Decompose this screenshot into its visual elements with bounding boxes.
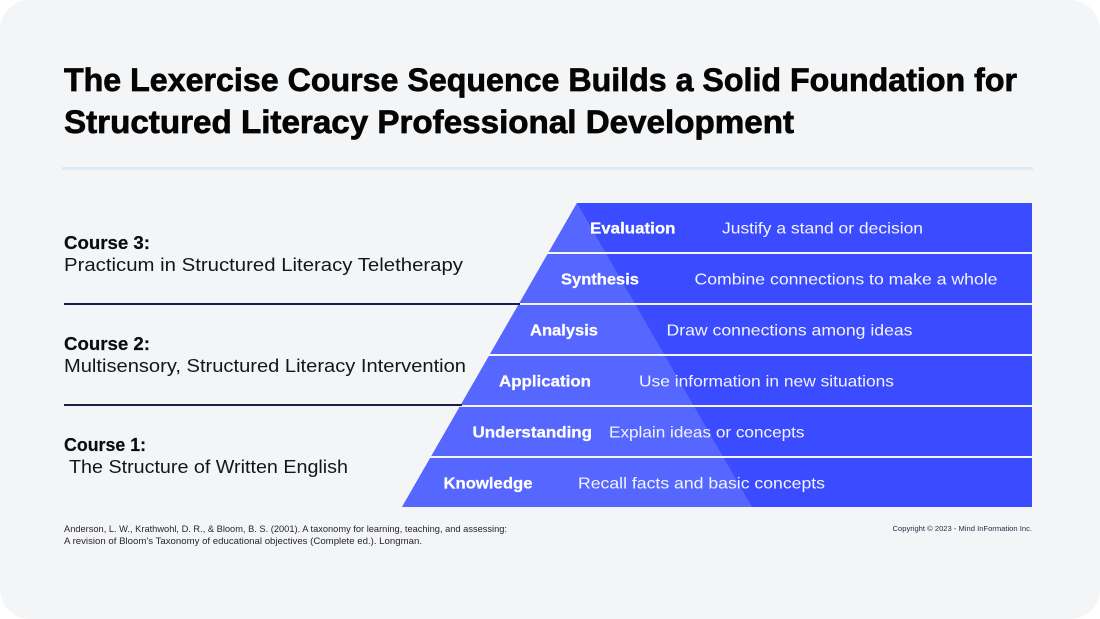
level: synthesis: Combine connections to make a whole xyxy=(694,272,998,288)
level: understanding: Explain ideas or concepts xyxy=(609,424,804,442)
level: knowledge xyxy=(444,476,825,492)
level: synthesis xyxy=(561,272,998,288)
course 1 label: The Structure of Written English xyxy=(69,456,348,477)
level: analysis: Draw connections among ideas xyxy=(666,322,912,340)
level: synthesis: Synthesis xyxy=(561,272,639,288)
level: application: Use information in new situations xyxy=(639,374,894,390)
course 3 label: Course 3: xyxy=(64,232,150,253)
course 2 label: Course 2: xyxy=(64,333,150,354)
course 1 label: Course 1: xyxy=(64,434,146,455)
course 3 label xyxy=(64,232,464,275)
level: evaluation: Evaluation xyxy=(590,220,676,238)
citation xyxy=(64,524,507,546)
course labels xyxy=(64,232,466,477)
level: evaluation: Justify a stand or decision xyxy=(722,220,923,238)
level: analysis: Analysis xyxy=(530,322,598,340)
pyramid chart xyxy=(402,203,1033,507)
title xyxy=(64,62,1017,140)
course 2 label xyxy=(64,333,466,376)
level: knowledge: Recall facts and basic concepts xyxy=(578,476,825,492)
level: evaluation xyxy=(590,220,923,238)
citation: Anderson, L. W., Krathwohl, D. R., & Bloom, B. S. (2001). A taxonomy for learning, teaching, and assessing: xyxy=(64,524,507,534)
course 2 label: Multisensory, Structured Literacy Intervention xyxy=(64,355,466,376)
citation: A revision of Bloom's Taxonomy of educational objectives (Complete ed.). Longman. xyxy=(64,536,422,546)
level: application: Application xyxy=(499,374,591,390)
level: analysis xyxy=(530,322,912,340)
copyright: Copyright © 2023 - Mind InFormation Inc. xyxy=(892,524,1032,533)
title: The Lexercise Course Sequence Builds a Solid Foundation for xyxy=(64,62,1017,98)
course 3 label: Practicum in Structured Literacy Teletherapy xyxy=(64,254,464,275)
title: Structured Literacy Professional Development xyxy=(64,104,794,140)
level: application xyxy=(499,374,894,390)
level: understanding: Understanding xyxy=(472,424,592,442)
course 1 label xyxy=(64,434,348,477)
level: knowledge: Knowledge xyxy=(444,476,533,492)
level: understanding xyxy=(472,424,804,442)
